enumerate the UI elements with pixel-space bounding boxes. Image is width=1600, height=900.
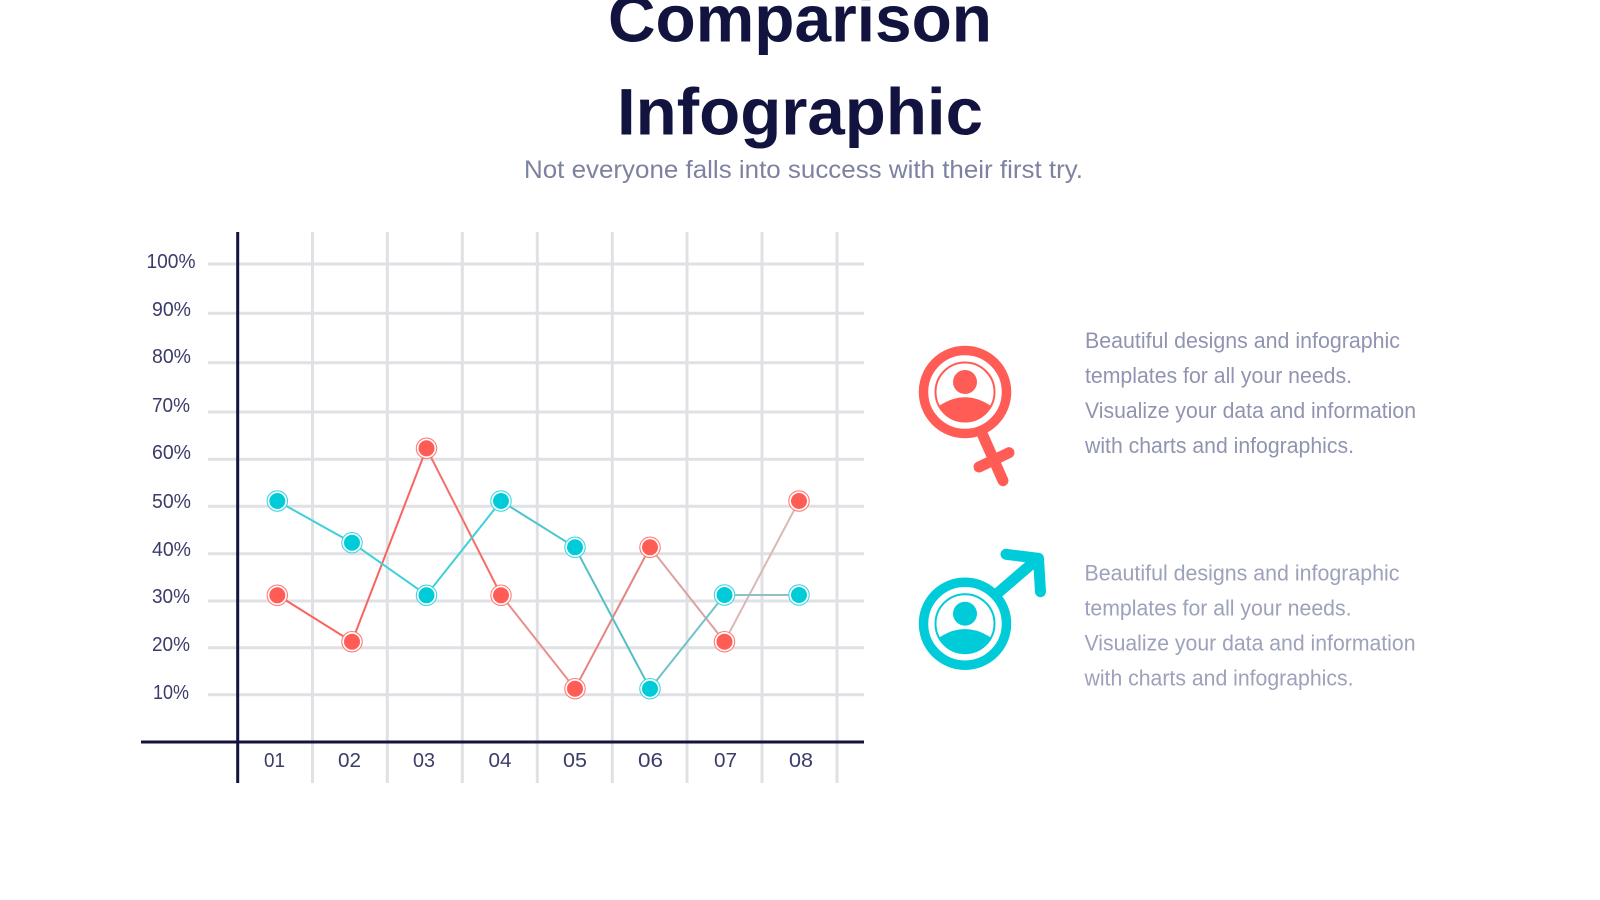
y axis labels: 100% — [146, 251, 196, 273]
text block: female description: templates for all your needs. — [1085, 363, 1352, 388]
text block: male description: with charts and infographics. — [1084, 666, 1354, 690]
x axis labels: 02 — [338, 750, 361, 772]
y axis labels: 10% — [153, 682, 189, 704]
teal data points — [267, 491, 809, 699]
series: coral line — [277, 448, 799, 689]
x axis labels: 07 — [714, 750, 737, 772]
x axis labels: 01 — [264, 750, 285, 772]
series: teal line — [277, 501, 799, 689]
x axis labels: 08 — [789, 750, 813, 772]
line chart — [141, 232, 864, 783]
y axis labels — [146, 251, 196, 704]
chart axes — [141, 232, 864, 783]
x axis labels: 06 — [638, 750, 663, 772]
text block: female description: with charts and infographics. — [1084, 433, 1354, 458]
text block: female description: Visualize your data and information — [1085, 398, 1416, 423]
text block: male description: Beautiful designs and infographic — [1084, 560, 1400, 586]
coral data points — [267, 438, 809, 699]
y axis labels: 50% — [152, 491, 191, 513]
y axis labels: 20% — [152, 634, 190, 656]
title — [608, 0, 992, 148]
text block: male description: Visualize your data and information — [1084, 630, 1416, 656]
text block: male description: templates for all your needs. — [1084, 596, 1352, 620]
text block: female description — [1084, 328, 1416, 458]
icon: female symbol with person — [924, 350, 1009, 481]
y axis labels: 60% — [152, 442, 191, 464]
x axis labels — [264, 750, 813, 772]
y axis labels: 30% — [152, 586, 190, 608]
text block: male description — [1084, 560, 1416, 690]
y axis labels: 90% — [152, 299, 191, 321]
title: Infographic — [617, 74, 983, 148]
text block: female description: Beautiful designs and infographic — [1085, 328, 1400, 353]
icon: male symbol with person — [924, 554, 1040, 665]
y axis labels: 70% — [152, 395, 190, 417]
x axis labels: 04 — [488, 750, 512, 772]
x axis labels: 03 — [413, 750, 435, 772]
subtitle: Not everyone falls into success with their first try. — [524, 156, 1083, 184]
y axis labels: 40% — [152, 539, 191, 561]
x axis labels: 05 — [563, 750, 587, 772]
y axis labels: 80% — [152, 346, 191, 368]
